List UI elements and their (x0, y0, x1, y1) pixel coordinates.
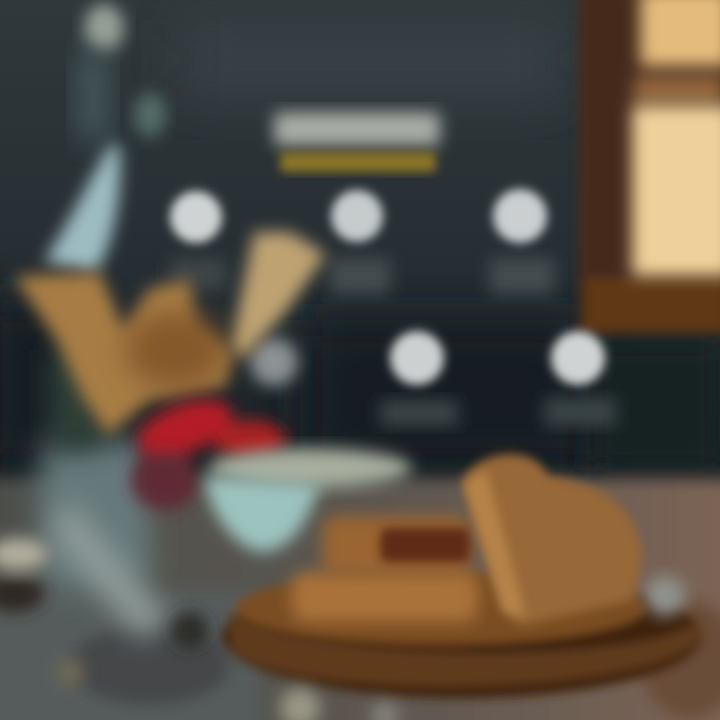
red peppers (130, 388, 286, 510)
item 1 (170, 191, 226, 290)
item 3 (490, 189, 554, 294)
toast and bread on plate (292, 454, 685, 626)
item 4 (250, 338, 298, 386)
table surface (0, 478, 720, 720)
title (274, 112, 440, 172)
small dish left (0, 538, 48, 612)
background wall (0, 0, 720, 490)
icon row 1 (170, 189, 554, 294)
item 6 (544, 331, 616, 426)
icon row 2 (250, 331, 616, 426)
window panes (632, 0, 720, 276)
item 2 (330, 190, 390, 294)
table crumbs (56, 612, 399, 720)
item 5 (380, 331, 458, 426)
window frame (578, 0, 720, 335)
glass vase (40, 4, 170, 640)
bread sticks in glass (14, 232, 326, 436)
wooden plate (222, 572, 702, 698)
small bowl (204, 448, 412, 552)
